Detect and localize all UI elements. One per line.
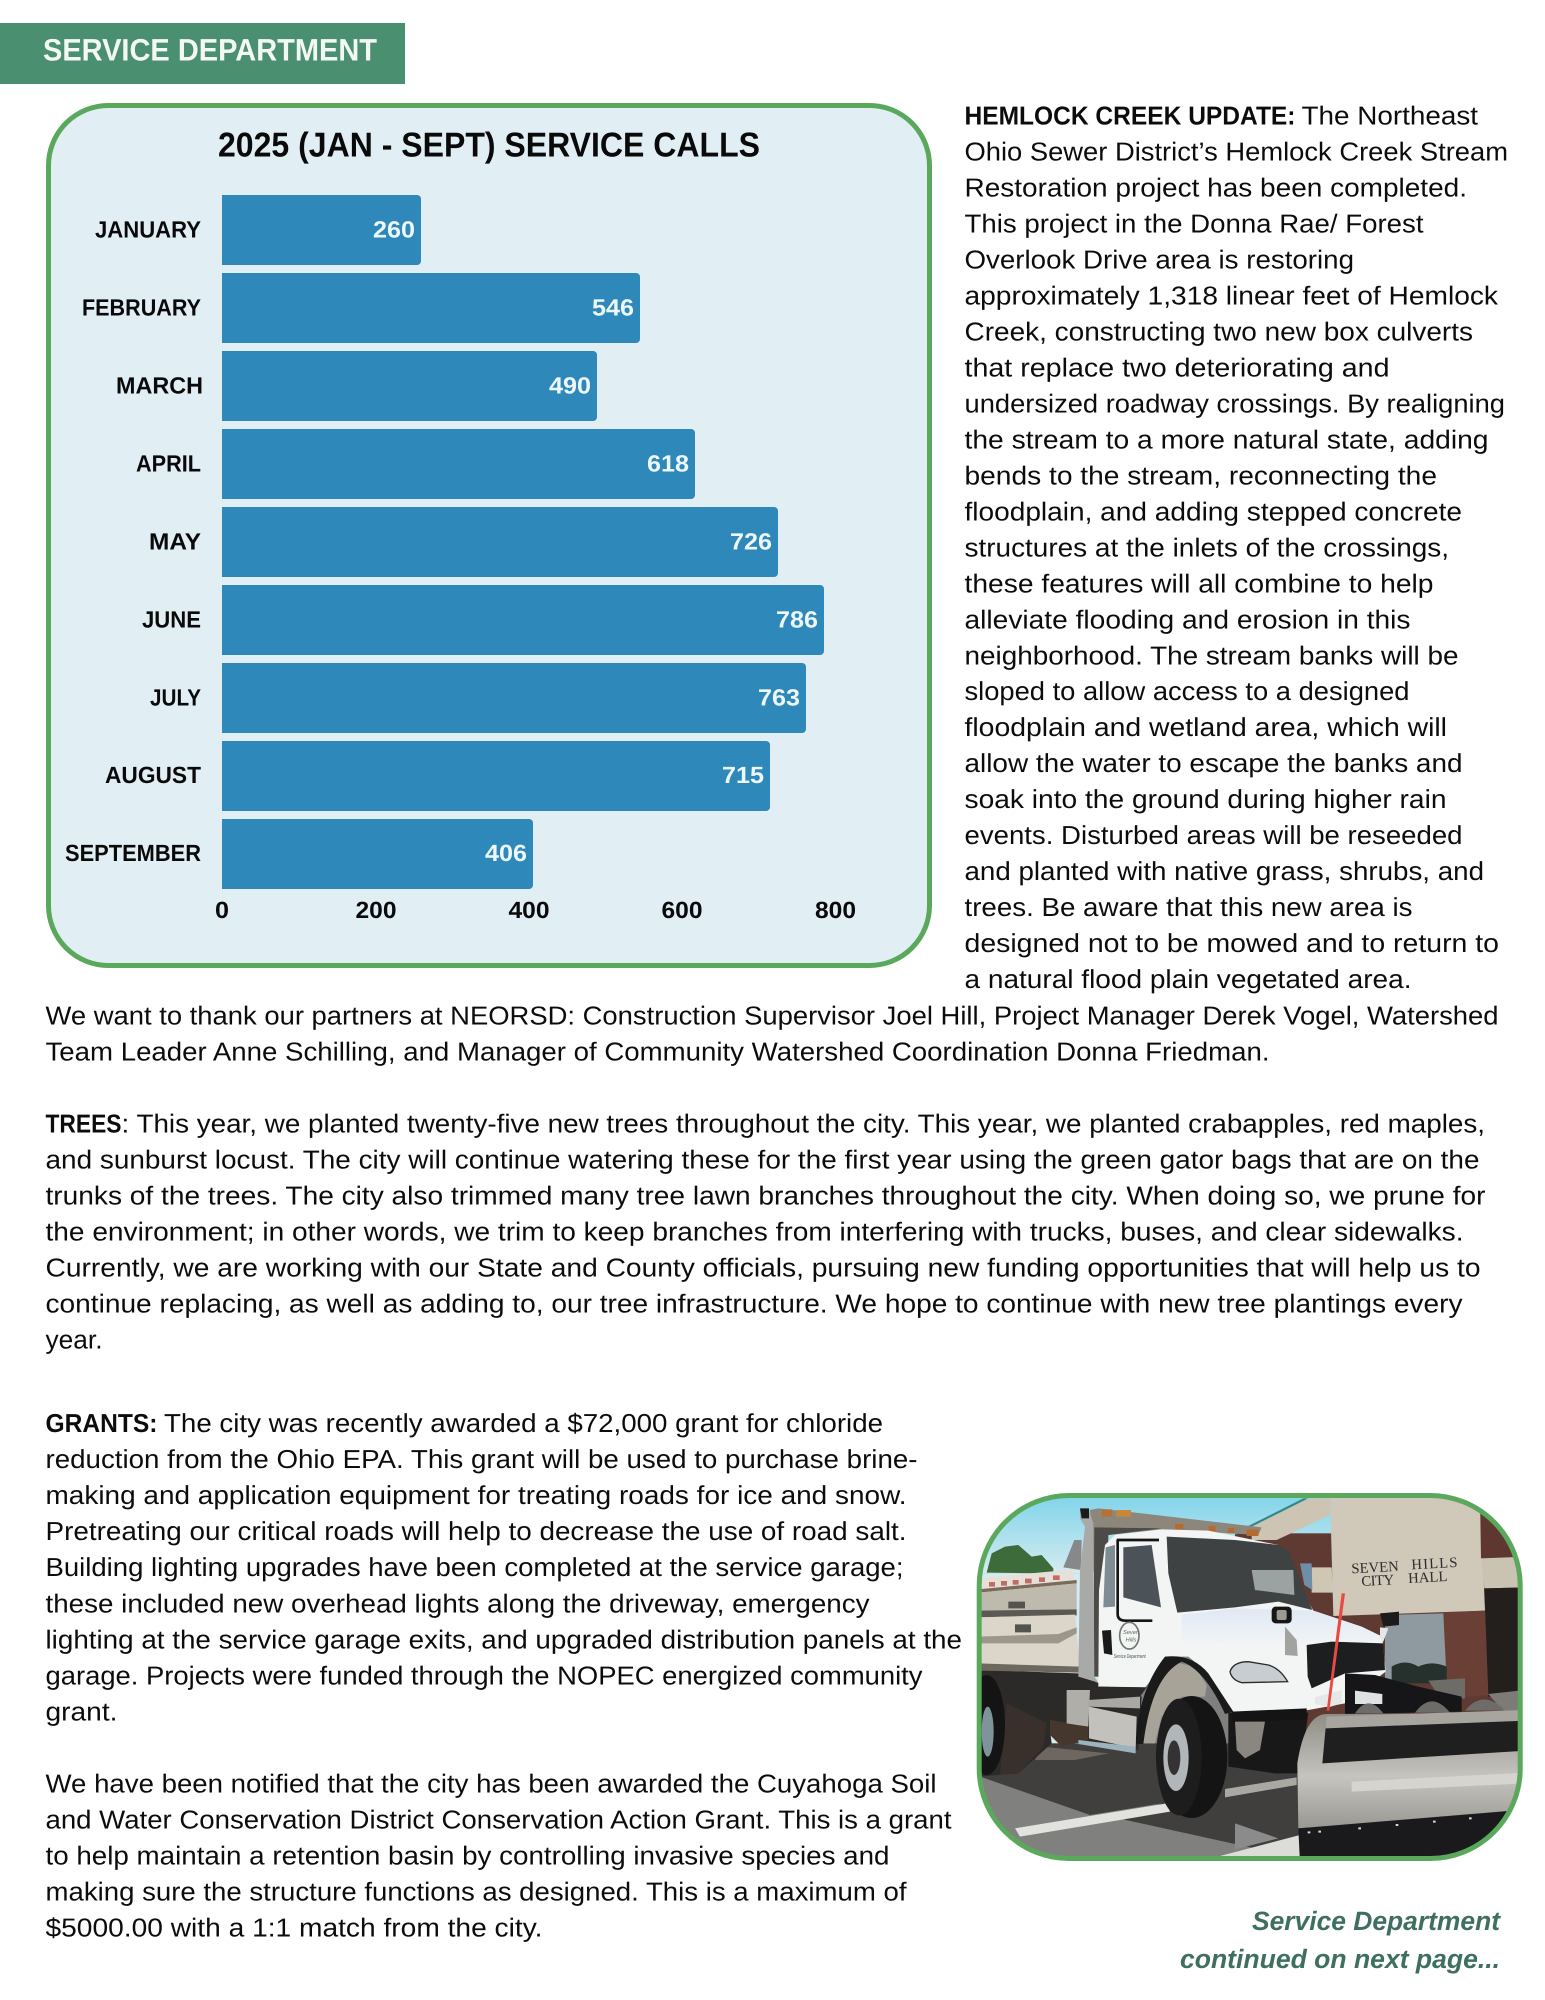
text block: trees [46, 1109, 1486, 1354]
text block: Hemlock Creek update: these features will all combine to help [964, 568, 1434, 598]
x axis labels: 200 [356, 897, 396, 923]
x axis labels: 800 [815, 897, 856, 923]
text block: conservation action grant: We have been notified that the city has been awarded the Cuyahoga Soil [46, 1768, 936, 1798]
bar: May: 726 [730, 528, 772, 554]
section banner: Service Department [0, 23, 405, 84]
plow blade [1297, 1713, 1525, 1828]
dump body [978, 1569, 1074, 1589]
door emblem [1120, 1622, 1139, 1649]
truck rear frame [978, 1670, 1142, 1777]
photo: snow plow truck at Seven Hills City Hall [968, 1493, 1525, 1863]
text block: conservation action grant: $5000.00 with a 1:1 match from the city. [46, 1913, 542, 1943]
text block: trees: Currently, we are working with our State and County officials, pursuing new funding opportunities that will help us to [46, 1252, 1480, 1282]
sign lettering: CITY [1361, 1571, 1394, 1589]
text block: grants [46, 1408, 962, 1726]
text block: trees: continue replacing, as well as adding to, our tree infrastructure. We hope to continue with new tree plantings every [46, 1288, 1462, 1318]
text block: Hemlock Creek update: the stream to a more natural state, adding [964, 424, 1488, 454]
under hood [1228, 1713, 1308, 1773]
text block: Hemlock Creek update: undersized roadway crossings. By realigning [964, 388, 1505, 418]
section banner: Service Department: SERVICE DEPARTMENT [43, 32, 377, 68]
text block: trees: and sunburst locust. The city will continue watering these for the first year using the green gator bags that are on the [46, 1144, 1480, 1174]
x axis labels: 400 [508, 897, 550, 923]
bar: August [105, 741, 770, 811]
red marker pole [1327, 1593, 1345, 1711]
x axis labels [215, 897, 856, 923]
bar: April: APRIL [136, 450, 201, 476]
text block: trees: trunks of the trees. The city also trimmed many tree lawn branches throughout the city. When doing so, we prune for [46, 1180, 1486, 1210]
text block: thanks to NEORSD partners: We want to thank our partners at NEORSD: Construction Supervisor Joel Hill, Project Manager Derek Vogel, Watershed [46, 1001, 1499, 1031]
bar: September: SEPTEMBER [65, 840, 201, 866]
text block: grants: grant. [46, 1696, 118, 1726]
text block: Hemlock Creek update: floodplain, and adding stepped concrete [964, 496, 1462, 526]
text block: grants: The city was recently awarded a $72,000 grant for chloride [164, 1408, 883, 1438]
text block: Hemlock Creek update: trees. Be aware that this new area is [964, 892, 1412, 922]
text block: Hemlock Creek update: allow the water to escape the banks and [964, 748, 1462, 778]
text block: Hemlock Creek update: soak into the ground during higher rain [964, 784, 1446, 814]
text block: Hemlock Creek update: Overlook Drive area is restoring [964, 245, 1354, 275]
text block: grants: these included new overhead lights along the driveway, emergency [46, 1588, 870, 1618]
bar: May [149, 507, 778, 577]
caption: continued on next page: Service Department [1252, 1906, 1501, 1936]
text block: thanks to NEORSD partners: Team Leader Anne Schilling, and Manager of Community Watershed Coordination Donna Friedman. [46, 1037, 1270, 1067]
bar: June: 786 [776, 606, 818, 632]
bar: April [136, 429, 695, 499]
text block: grants: Building lighting upgrades have been completed at the service garage; [46, 1552, 904, 1582]
photo: snow plow truck at Seven Hills City Hall: Hills [1126, 1636, 1137, 1643]
headlight [1230, 1662, 1288, 1683]
text block: conservation action grant [46, 1768, 952, 1943]
text block: Hemlock Creek update: designed not to be mowed and to return to [964, 928, 1499, 958]
text block: conservation action grant: and Water Conservation District Conservation Action Grant. This is a grant [46, 1805, 952, 1835]
bar: July: JULY [150, 684, 201, 710]
text block: thanks to NEORSD partners [46, 1001, 1499, 1067]
text block: Hemlock Creek update: approximately 1,318 linear feet of Hemlock [964, 280, 1499, 310]
bar: May: MAY [149, 528, 201, 554]
plow hitch [1345, 1673, 1462, 1714]
text block: Hemlock Creek update: Restoration project has been completed. [964, 173, 1467, 203]
bar: January [95, 195, 421, 265]
cab and hood [1098, 1529, 1386, 1713]
chrome stack [1078, 1508, 1098, 1683]
panel: service calls bar chart [48, 106, 930, 966]
x axis labels: 0 [215, 897, 229, 923]
text block: trees: TREES [46, 1109, 122, 1139]
fuel step [1067, 1690, 1090, 1727]
bar: February: 546 [592, 294, 634, 320]
grille [1307, 1642, 1385, 1688]
bar: January: JANUARY [95, 216, 201, 242]
bar: August: AUGUST [105, 762, 202, 788]
bar: September: 406 [485, 840, 527, 866]
text block: Hemlock Creek update: Creek, constructing two new box culverts [964, 316, 1473, 346]
bar: March: MARCH [116, 372, 203, 398]
text block: Hemlock Creek update: events. Disturbed areas will be reseeded [964, 820, 1462, 850]
bar: February: FEBRUARY [82, 294, 201, 320]
chart title: 2025 (JAN - SEPT) SERVICE CALLS [218, 126, 760, 164]
front wheel [1156, 1696, 1227, 1818]
bar: March: 490 [549, 372, 591, 398]
text block: grants: reduction from the Ohio EPA. This grant will be used to purchase brine- [46, 1444, 918, 1474]
text block: Hemlock Creek update: Ohio Sewer District’s Hemlock Creek Stream [964, 137, 1508, 167]
text block: Hemlock Creek update: that replace two deteriorating and [964, 352, 1390, 382]
text block: conservation action grant: making sure the structure functions as designed. This is a maximum of [46, 1877, 907, 1907]
canopy [1090, 1508, 1262, 1573]
text block: grants: lighting at the service garage exits, and upgraded distribution panels at the [46, 1624, 962, 1654]
bar: April: 618 [647, 450, 689, 476]
text block: Hemlock Creek update: and planted with native grass, shrubs, and [964, 856, 1484, 886]
sign lettering: HALL [1408, 1568, 1448, 1586]
text block: Hemlock Creek update: structures at the inlets of the crossings, [964, 532, 1449, 562]
x axis labels: 600 [662, 897, 702, 923]
bar: September [65, 819, 533, 889]
text block: Hemlock Creek update [964, 101, 1508, 994]
text block: grants: garage. Projects were funded through the NOPEC energized community [46, 1660, 923, 1690]
text block: Hemlock Creek update: This project in the Donna Rae/ Forest [964, 209, 1424, 239]
fender arch [1143, 1662, 1207, 1743]
text block: trees: the environment; in other words, we trim to keep branches from interfering with trucks, buses, and clear sidewalks. [46, 1216, 1464, 1246]
text block: Hemlock Creek update: bends to the stream, reconnecting the [964, 460, 1437, 490]
bar: August: 715 [722, 762, 764, 788]
text block: Hemlock Creek update: The Northeast [1302, 101, 1479, 131]
bar: July: 763 [758, 684, 800, 710]
sign lettering [1352, 1558, 1457, 1586]
bar: July [150, 663, 806, 733]
caption: continued on next page [1180, 1906, 1501, 1974]
text block: Hemlock Creek update: HEMLOCK CREEK UPDATE: [964, 101, 1296, 131]
text block: grants: making and application equipment for treating roads for ice and snow. [46, 1480, 906, 1510]
text block: Hemlock Creek update: alleviate flooding and erosion in this [964, 604, 1410, 634]
text block: Hemlock Creek update: floodplain and wetland area, which will [964, 712, 1447, 742]
sign lettering: SEVEN [1351, 1558, 1399, 1577]
bar: June [142, 585, 824, 655]
text block: Hemlock Creek update: neighborhood. The stream banks will be [964, 640, 1458, 670]
text block: Hemlock Creek update: a natural flood plain vegetated area. [964, 964, 1412, 994]
photo: snow plow truck at Seven Hills City Hall: Service Department [1114, 1653, 1146, 1659]
sign lettering: HILLS [1411, 1554, 1458, 1573]
hood mirror and stem [1272, 1607, 1292, 1623]
photo: snow plow truck at Seven Hills City Hall: Seven [1123, 1629, 1139, 1635]
text block: Hemlock Creek update: sloped to allow access to a designed [964, 676, 1410, 706]
bar: March [116, 351, 597, 421]
text block: grants: GRANTS: [46, 1408, 158, 1438]
bar: June: JUNE [142, 606, 201, 632]
text block: trees: year. [46, 1324, 102, 1354]
text block: trees: : This year, we planted twenty-five new trees throughout the city. This year, we planted crabapples, red maples, [122, 1109, 1485, 1139]
bar: February [82, 273, 640, 343]
caption: continued on next page: continued on next page... [1180, 1944, 1500, 1974]
text block: grants: Pretreating our critical roads will help to decrease the use of road salt. [46, 1516, 906, 1546]
bar: January: 260 [373, 216, 415, 242]
text block: conservation action grant: to help maintain a retention basin by controlling invasive species and [46, 1841, 890, 1871]
pavement [1052, 1743, 1078, 1744]
